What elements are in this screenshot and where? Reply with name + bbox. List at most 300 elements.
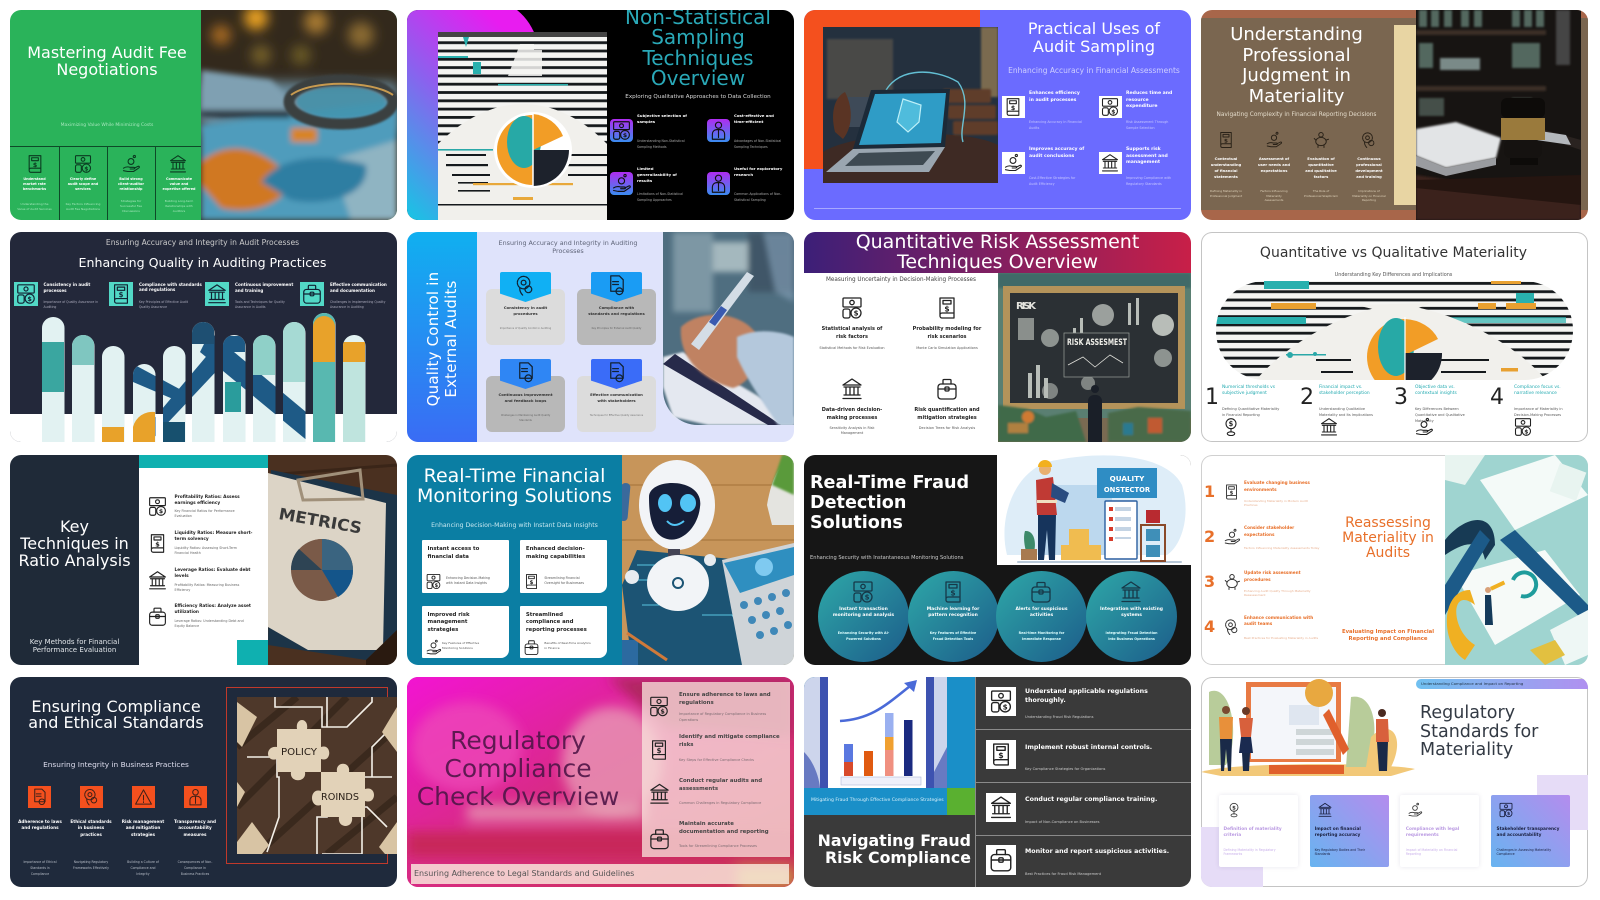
item label <box>734 166 782 177</box>
step heading: contextual insights <box>1415 391 1457 396</box>
title <box>407 726 629 812</box>
column label: accountability <box>178 825 212 830</box>
column label: user needs and <box>1258 163 1290 167</box>
title <box>10 518 139 569</box>
icon tile <box>1099 152 1122 174</box>
icon: money <box>424 573 442 590</box>
icon: hand <box>1414 417 1434 437</box>
column label: Continuous <box>1357 157 1381 161</box>
card note: Compliance <box>1496 852 1515 856</box>
item note: Statistical Sampling <box>734 198 766 202</box>
column note: Implications of <box>1358 189 1380 193</box>
column note: Compliance <box>31 872 49 876</box>
circle: integration <box>1086 571 1177 662</box>
step note: Best Practices for Evaluating Materiality in Audits <box>1244 636 1318 640</box>
item label: Supports risk <box>1126 147 1161 152</box>
item label: Profitability Ratios: Assess <box>174 495 240 500</box>
item label <box>235 282 293 294</box>
item label <box>174 531 252 543</box>
item label: levels <box>174 574 189 579</box>
step heading: Financial impact vs. <box>1319 385 1362 390</box>
action note 3: Successful Fee <box>120 204 142 208</box>
card label <box>577 305 656 316</box>
card heading: strategies <box>428 627 458 633</box>
card note: Reporting <box>1406 852 1421 856</box>
step note: Reassessment <box>1244 593 1266 597</box>
icon: gear head <box>1223 616 1241 636</box>
item label: regulations <box>679 700 714 706</box>
circle label: Instant transaction <box>839 607 888 612</box>
action labels: Understand <box>23 177 46 181</box>
item label: risks <box>679 742 694 748</box>
vertical title: External Audits <box>442 280 460 398</box>
column note: Professional Skepticism <box>1304 194 1338 198</box>
action label 4: Communicate <box>166 177 192 181</box>
item label <box>1126 90 1172 109</box>
title <box>10 698 222 732</box>
panel: Quality Control in External Audits <box>407 232 794 442</box>
column label <box>1249 156 1299 174</box>
step note <box>1415 406 1465 424</box>
column: user needs <box>1249 131 1297 207</box>
icon: money <box>648 695 670 718</box>
card note <box>544 641 591 650</box>
circle label <box>818 607 909 620</box>
column label: Evaluation of <box>1307 157 1335 161</box>
row: internal controls <box>975 730 1191 783</box>
item label <box>1029 146 1084 159</box>
number: 1 <box>1205 385 1219 410</box>
item label: expenditure <box>1126 104 1157 109</box>
item label: Probability modeling for <box>913 326 981 332</box>
step note <box>1319 406 1373 418</box>
title: Quantitative vs Qualitative Materiality <box>1260 245 1527 261</box>
item label: research <box>734 172 753 177</box>
photo: robot with tablet and calculator <box>622 455 794 665</box>
item note <box>637 139 685 149</box>
column note: Importance of Ethical <box>23 860 57 864</box>
title <box>1201 25 1392 107</box>
item label <box>174 604 251 615</box>
panel: Quantitative Risk Assessment Techniques Overview <box>804 232 1191 442</box>
step 1 <box>1205 382 1297 438</box>
circle note: Fraud Detection Tools <box>933 637 973 641</box>
item note: Decision Trees for Risk Analysis <box>919 426 975 430</box>
title: Sampling <box>651 25 745 49</box>
item label <box>637 113 687 124</box>
photo background: blurred magnifier in magenta <box>407 677 794 887</box>
card label: Consistency in audit <box>504 305 547 310</box>
item: exploratory research <box>707 166 782 202</box>
icon tile <box>986 793 1016 822</box>
title: Navigating Fraud <box>818 831 971 850</box>
card note <box>1406 848 1457 856</box>
action label 3: client-auditor <box>118 182 144 186</box>
action note 3: Strategies for <box>121 199 141 203</box>
gradient side bar <box>407 232 477 442</box>
item note: Liquidity Ratios: Assessing Short-Term <box>174 546 237 550</box>
column note: Reporting <box>1362 198 1376 202</box>
step heading: audit teams <box>1244 621 1272 626</box>
item label <box>1126 147 1168 167</box>
circle label: Integration with existing <box>1100 607 1163 612</box>
item note <box>734 139 781 149</box>
row label: Conduct regular compliance training. <box>1025 796 1157 803</box>
title <box>407 466 622 506</box>
column: contextual understanding <box>1201 131 1249 207</box>
item label: Consistency in audit <box>44 282 90 287</box>
action labels: market rate <box>23 182 46 186</box>
item label <box>734 113 774 124</box>
icon: bank <box>1317 802 1333 818</box>
action label 4: expertise offered <box>163 187 195 191</box>
column label: factors <box>1314 175 1328 179</box>
column note <box>169 859 221 878</box>
step heading: Enhance communication with <box>1244 614 1313 620</box>
item label: Subjective selection of <box>637 113 687 118</box>
step note <box>1514 406 1563 418</box>
item label: Ensure adherence to laws and <box>679 692 771 698</box>
column label <box>14 819 66 832</box>
item note: Monte Carlo Simulation Applications <box>916 346 978 350</box>
top ribbon <box>1416 679 1588 689</box>
icon: book <box>648 738 670 762</box>
subtitle: Performance Evaluation <box>33 646 116 654</box>
item note: Audits <box>1029 126 1039 130</box>
item label: risk scenarios <box>927 334 967 340</box>
title: Real-Time Financial <box>424 465 605 487</box>
panel: Ensuring Compliance and Ethical Standards <box>10 677 397 887</box>
action note 4 <box>165 199 194 213</box>
card label <box>486 305 565 316</box>
action label 3 <box>118 177 144 191</box>
white base <box>10 414 397 442</box>
circle label <box>1086 607 1177 620</box>
circle note <box>1086 630 1177 642</box>
vertical title: Quality Control in <box>424 272 442 406</box>
item note: Advantages of Non-Statistical <box>734 139 781 143</box>
item note: Sampling Methods <box>637 145 667 149</box>
item note <box>1029 176 1076 186</box>
column note: Professional Judgment <box>1210 194 1242 198</box>
item label: earnings efficiency <box>174 501 220 506</box>
row note: Impact of Non-Compliance on Businesses <box>1025 820 1099 824</box>
subtitle: Exploring Qualitative Approaches to Data Collection <box>625 94 771 100</box>
item label: Risk quantification and <box>914 407 980 413</box>
icon tile <box>986 845 1016 875</box>
closing note <box>1326 629 1450 643</box>
bottom caption bar <box>411 864 789 884</box>
title: Techniques <box>642 46 754 70</box>
card label: standards and regulations <box>588 311 645 316</box>
card note <box>446 576 490 586</box>
card note: Challenges in Assessing Materiality <box>1496 848 1551 852</box>
action labels <box>23 177 46 191</box>
item label: Conduct regular audits and <box>679 778 762 784</box>
step note <box>1244 498 1308 507</box>
item label <box>44 282 90 294</box>
item label: results <box>637 178 652 183</box>
item note: Tools for Streamlining Compliance Processes <box>679 844 757 848</box>
circle note: into Business Operations <box>1108 637 1155 641</box>
item label <box>330 282 387 294</box>
column note: Frameworks Effectively <box>73 866 109 870</box>
icon: pin <box>1221 417 1241 437</box>
item label: Effective communication <box>330 282 387 287</box>
column note <box>1345 189 1393 203</box>
step 3 <box>1204 570 1324 600</box>
action note 4: Building Long-term <box>165 199 193 203</box>
circle: transaction monitoring <box>818 571 909 662</box>
title: Key <box>60 517 89 536</box>
item note: Key Financial Ratios for Performance <box>174 509 235 513</box>
column label: Assessment of <box>1259 157 1289 161</box>
item note: Auditing <box>44 305 56 309</box>
icon: bank <box>147 570 168 591</box>
illustration: quality inspector <box>997 455 1191 565</box>
icon: briefcase <box>648 827 671 851</box>
item label: Maintain accurate <box>679 821 734 827</box>
circle label: pattern recognition <box>928 613 978 618</box>
column label <box>1297 156 1345 180</box>
column note <box>65 859 117 871</box>
chalkboard word: RISK: RISK <box>1016 301 1037 312</box>
item note <box>1029 120 1082 130</box>
column label <box>169 819 221 838</box>
title banner <box>804 232 1191 273</box>
circle label: activities <box>1030 613 1053 618</box>
item note: Key Principles of Effective Audit <box>139 300 188 304</box>
item label: resource <box>1126 98 1149 103</box>
icon tile <box>1002 96 1024 118</box>
card heading: making capabilities <box>526 554 585 560</box>
icon tile <box>1002 152 1024 174</box>
icon: money <box>851 580 875 604</box>
item label: Efficiency Ratios: Analyze asset <box>174 604 251 609</box>
column label: Contextual <box>1215 157 1237 161</box>
step heading: narrative relevance <box>1514 391 1557 396</box>
action note 3: Discussions <box>122 209 140 213</box>
card note: Key Features of Effective <box>442 641 479 645</box>
card note: Oversight for Businesses <box>544 581 584 585</box>
step note: Factors Influencing Materiality Assessments Today <box>1244 546 1319 550</box>
item: efficiency <box>1002 90 1082 130</box>
panel: Regulatory Compliance Check Overview <box>407 677 794 887</box>
lavender accent right <box>1537 775 1588 830</box>
icon tile <box>28 786 51 808</box>
title: Compliance <box>444 754 592 783</box>
circle note: Enhancing Security with AI- <box>838 631 889 635</box>
item: communication <box>300 282 396 310</box>
column label: practices <box>80 832 102 837</box>
step heading: Numerical thresholds vs <box>1222 385 1275 390</box>
card heading <box>526 545 585 561</box>
item note <box>174 583 239 594</box>
item note: Risk Assessment Through <box>1126 120 1168 124</box>
icon: pin <box>1226 802 1242 818</box>
closing note: Reporting and Compliance <box>1348 636 1428 642</box>
card note: Streamlining Financial <box>544 576 580 580</box>
card note: Defining Materiality in Regulatory <box>1224 848 1276 852</box>
step note <box>1222 406 1279 418</box>
title: Standards for <box>1420 722 1538 742</box>
subtitle <box>10 638 139 655</box>
action note 1: Understanding the <box>20 202 48 206</box>
card label <box>1315 827 1361 840</box>
circle note: Key Features of Effective <box>930 631 976 635</box>
item note: Quality Assurance <box>139 305 167 309</box>
card body <box>577 376 656 432</box>
item: data-driven <box>804 376 900 438</box>
item label <box>679 820 769 836</box>
title: Judgment in <box>1242 65 1351 86</box>
item note: Leverage Ratios: Understanding Debt and <box>174 619 244 623</box>
column note: The Role of <box>1313 189 1329 193</box>
item label: Leverage Ratios: Evaluate debt <box>174 568 250 573</box>
column note: Materiality <box>1266 194 1282 198</box>
item: risk quantification <box>900 376 998 438</box>
action note 4: Relationships with <box>165 204 193 208</box>
icon tile <box>184 786 207 808</box>
item note: Limitations of Non-Statistical <box>637 192 683 196</box>
title: Materiality <box>1249 86 1344 107</box>
circle: machine learning <box>908 571 998 662</box>
card note: Key Principles for External Audit Quality <box>592 327 641 330</box>
step heading: expectations <box>1244 532 1274 537</box>
circle label <box>996 607 1087 620</box>
panel: Reassessing Materiality in Audits <box>1201 455 1588 665</box>
badge with icon <box>591 359 642 389</box>
item label: Data-driven decision- <box>822 407 882 413</box>
icon: briefcase <box>935 377 959 401</box>
step heading <box>1514 385 1561 397</box>
icon: money <box>1513 417 1533 437</box>
subtitle <box>479 239 657 256</box>
column: training <box>1345 131 1393 207</box>
title: and Ethical Standards <box>28 713 204 732</box>
card label <box>1224 827 1282 840</box>
step note: Decision-Making Processes <box>1514 413 1561 417</box>
card note: Benefits of Real-Time Analytics <box>544 641 591 645</box>
title: Monitoring Solutions <box>417 485 612 507</box>
item note: Key Steps for Effective Compliance Checks <box>679 758 754 762</box>
item: leverage <box>147 568 265 592</box>
subtitle: Ensuring Accuracy and Integrity in Audit Processes <box>106 238 299 247</box>
card: definition <box>1219 795 1298 867</box>
card label: Compliance with legal <box>1406 827 1459 832</box>
column note <box>1201 189 1251 198</box>
step note: Importance of Materiality in <box>1514 407 1563 411</box>
card heading <box>428 612 470 635</box>
item label: assessments <box>679 786 718 792</box>
title: Regulatory <box>450 726 586 754</box>
card label <box>577 392 656 403</box>
circle note <box>996 630 1087 642</box>
teal top bar <box>139 455 269 468</box>
step note: Enhancing Audit Quality Through Materiality <box>1244 588 1311 592</box>
subtitle: Ensuring Integrity in Business Practices <box>43 760 189 769</box>
icon tile <box>707 172 730 195</box>
panel: Regulatory Standards for Materiality <box>1201 677 1588 887</box>
icon: piggy bank <box>1223 572 1241 592</box>
title: Risk Compliance <box>825 848 971 867</box>
icon: briefcase <box>147 606 168 627</box>
item note: Sensitivity Analysis in Risk <box>830 426 874 430</box>
item note: Audit Efficiency <box>1029 182 1055 186</box>
step heading <box>1244 570 1301 583</box>
photo: gavel and bookshelf <box>1416 10 1581 220</box>
icon: money <box>840 296 864 320</box>
column label: Adherence to laws <box>18 819 62 824</box>
item note: Assurance in Auditing <box>330 305 364 309</box>
title <box>1326 516 1450 562</box>
item note: Evaluation <box>174 514 192 518</box>
icon tile <box>1099 96 1122 118</box>
card: improvement <box>486 359 565 432</box>
title <box>625 10 771 90</box>
icon: bank <box>1319 417 1339 437</box>
item: statistical analysis <box>804 294 900 354</box>
card heading: Enhanced decision- <box>526 546 585 552</box>
action label 2 <box>68 177 98 191</box>
step 2 <box>1204 525 1324 555</box>
number: 3 <box>1394 385 1408 410</box>
card: risk management <box>422 606 509 658</box>
card: impact <box>1310 795 1389 867</box>
icon: bank <box>648 782 671 806</box>
icon: hand <box>1265 131 1283 149</box>
column note: Compliance in <box>184 866 206 870</box>
item note <box>174 509 235 520</box>
step heading <box>1319 385 1370 397</box>
card label: Impact on financial <box>1315 827 1361 832</box>
card: compliance <box>577 272 656 345</box>
card label: Compliance with <box>599 305 634 310</box>
circle label: monitoring and analysis <box>833 613 894 618</box>
column note: Integrity <box>136 872 150 876</box>
item label: generalizability of <box>637 172 677 177</box>
action label 4: value and <box>170 182 188 186</box>
card note <box>1315 848 1365 856</box>
title <box>810 472 969 533</box>
panel: Quantitative vs Qualitative Materiality <box>1201 232 1588 442</box>
step 4 <box>1204 614 1324 644</box>
item note: Management <box>841 431 863 435</box>
card heading: financial data <box>428 554 469 560</box>
item: cost-effective <box>707 113 781 149</box>
title: Practical Uses of <box>1028 19 1160 38</box>
teal corner block <box>237 640 269 665</box>
step heading: Update risk assessment <box>1244 570 1301 575</box>
item label: Liquidity Ratios: Measure short- <box>174 531 252 536</box>
circle note: Immediate Response <box>1022 637 1061 641</box>
step heading: environments <box>1244 487 1277 492</box>
column note: Navigating Regulatory <box>74 860 108 864</box>
card label <box>486 392 565 403</box>
item note <box>235 300 285 310</box>
icon: money <box>147 496 168 517</box>
subtitle: Navigating Complexity in Financial Reporting Decisions <box>1217 112 1376 118</box>
step 3 <box>1394 382 1486 438</box>
card heading: compliance and <box>526 619 574 625</box>
green accent <box>947 788 975 814</box>
item note: Assurance in Audits <box>235 305 266 309</box>
panel: Non-Statistical Sampling Techniques Overview <box>407 10 794 220</box>
subtitle: Measuring Uncertainty in Decision-Making Processes <box>826 277 976 283</box>
row note: Best Practices for Fraud Risk Management <box>1025 872 1101 876</box>
circle label: Alerts for suspicious <box>1015 607 1068 612</box>
item label: Reduces time and <box>1126 91 1172 96</box>
